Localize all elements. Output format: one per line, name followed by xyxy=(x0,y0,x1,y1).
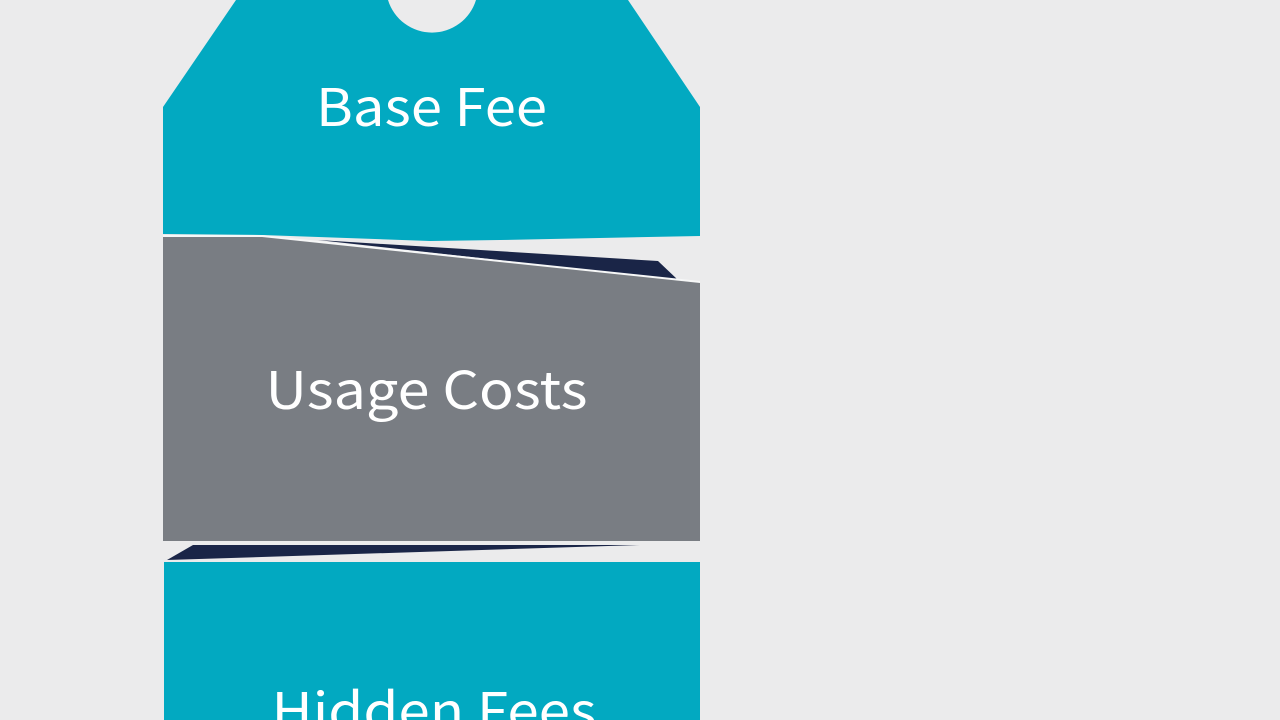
label: Usage Costs: Usage Costs xyxy=(266,349,588,424)
price tag graphic xyxy=(163,0,700,720)
panel: usage costs tag section xyxy=(163,235,700,541)
tear shard: lower navy xyxy=(167,545,640,560)
panel: base fee tag section xyxy=(163,0,700,241)
label: Base Fee: Base Fee xyxy=(316,66,547,141)
panel: hidden fees tag section xyxy=(164,562,700,720)
tear shard: upper navy xyxy=(318,240,678,280)
